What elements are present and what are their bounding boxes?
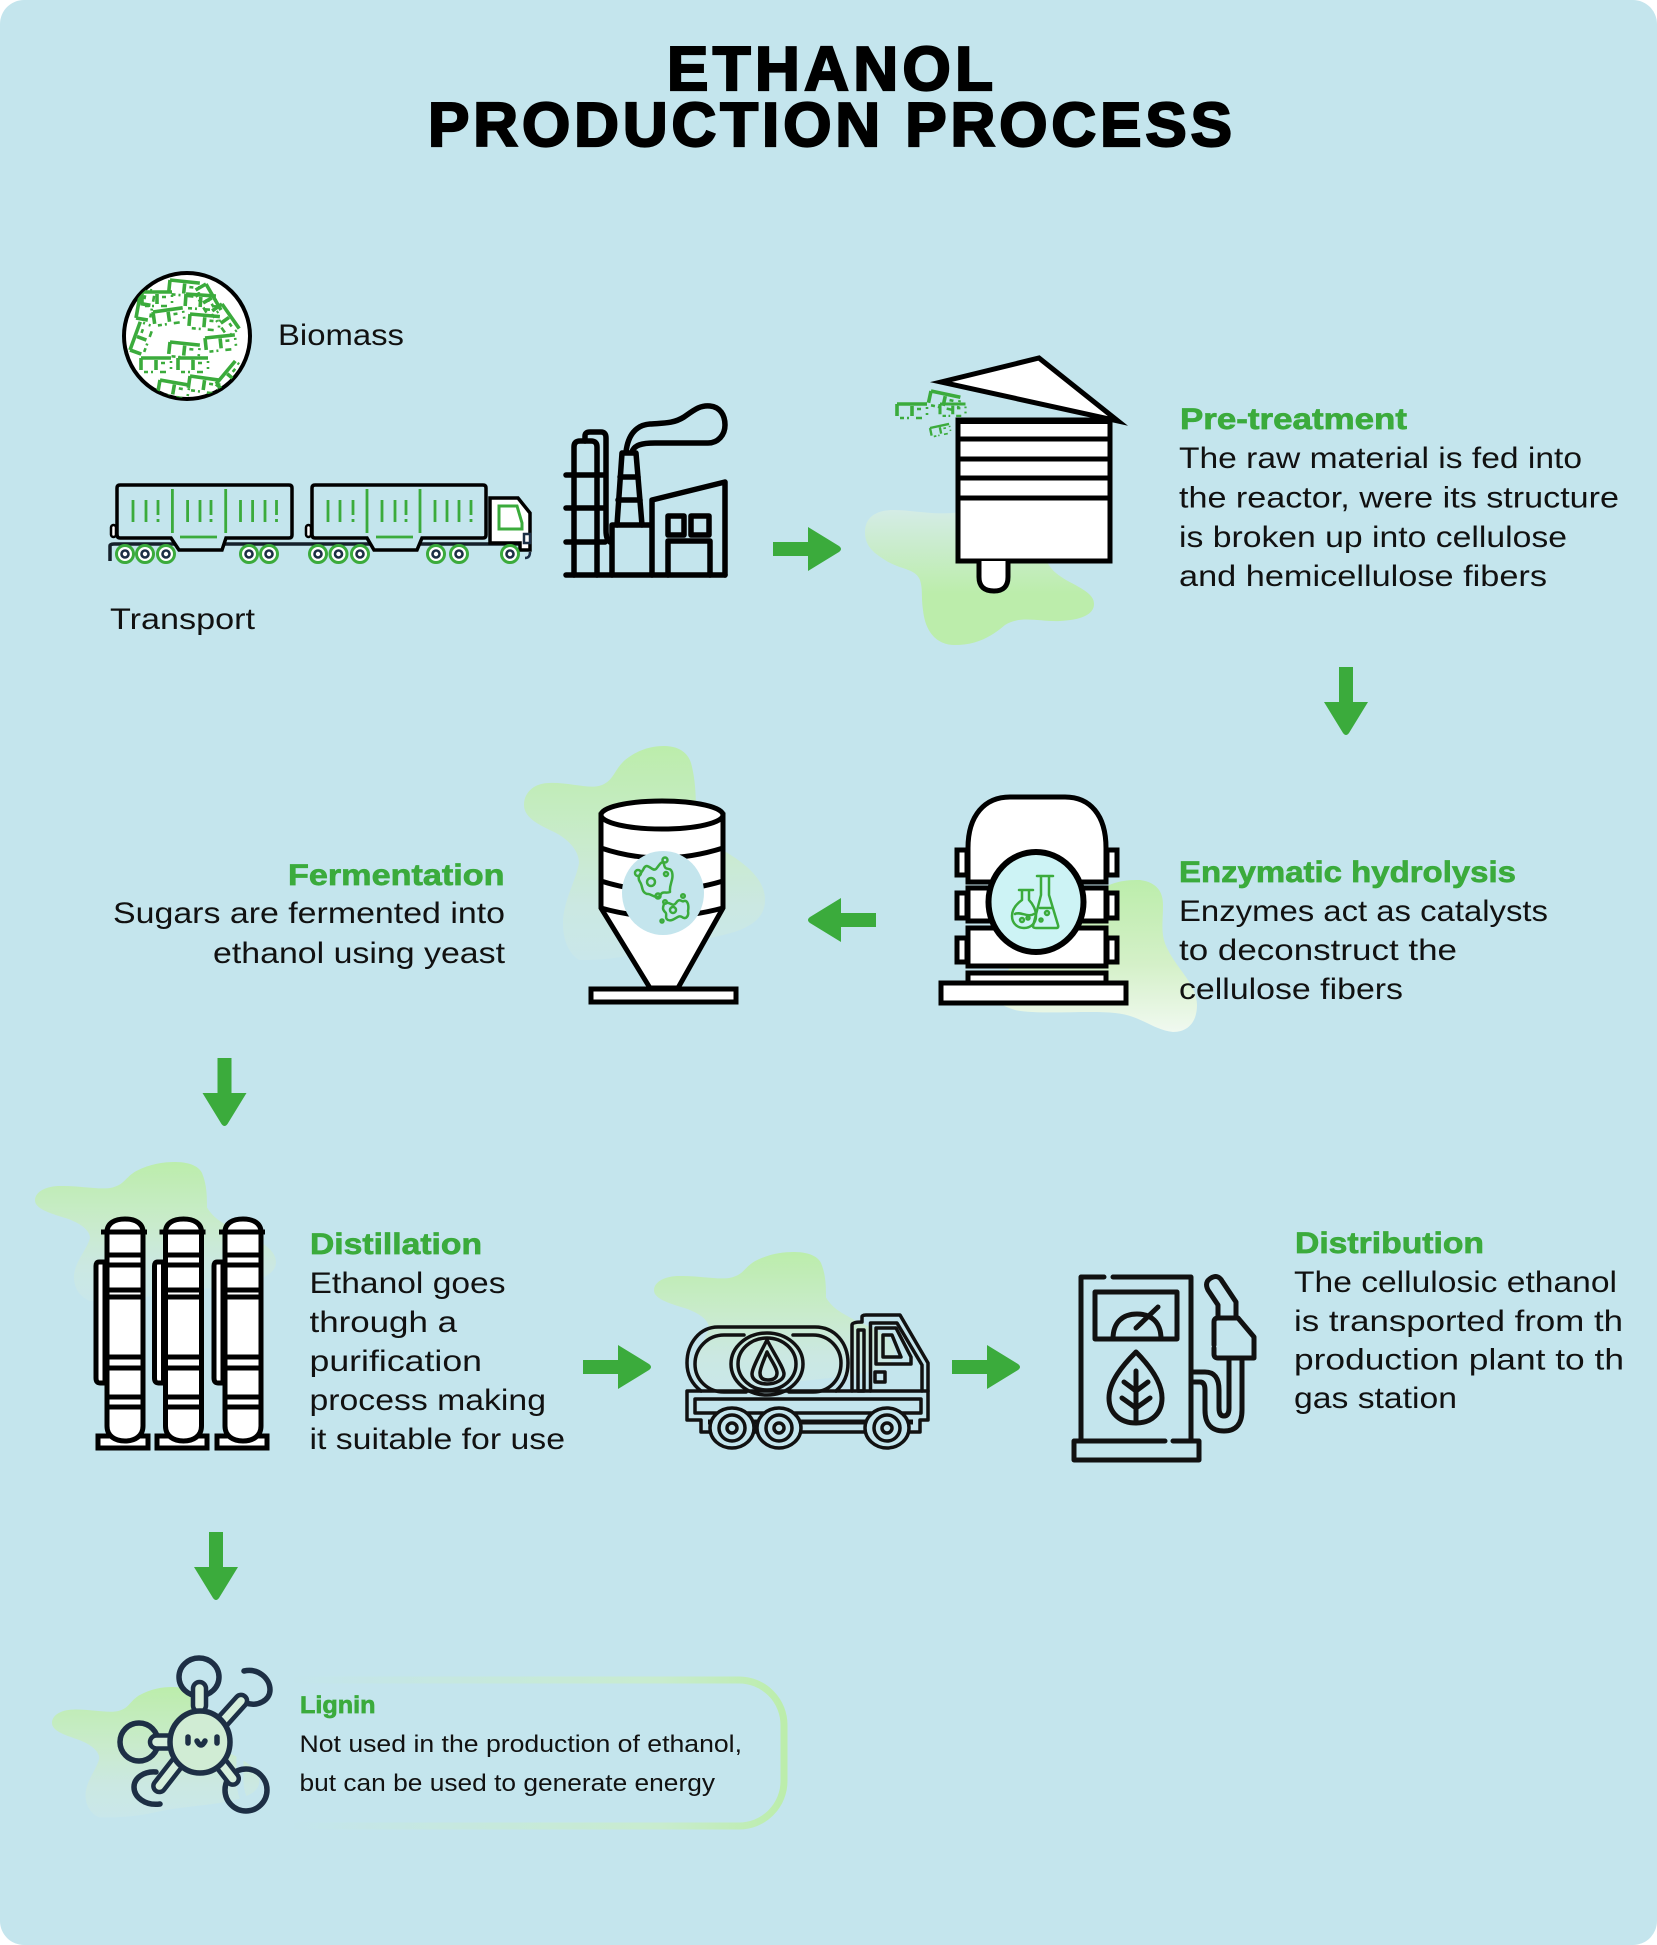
text block: distribution: The cellulosic ethanol (1294, 1266, 1617, 1299)
callout frame: lignin (240, 1680, 784, 1826)
text block: distillation: it suitable for use (310, 1423, 565, 1456)
text block: distillation: through a (310, 1306, 457, 1339)
icon: lignin molecule (120, 1658, 270, 1811)
text block: distillation: process making (310, 1384, 546, 1417)
text block: distillation (310, 1228, 565, 1456)
text block: pre-treatment: Pre-treatment (1180, 403, 1407, 436)
column 1 (96, 1219, 148, 1448)
label: biomass: Biomass (278, 319, 404, 352)
text block: pre-treatment: The raw material is fed into (1179, 442, 1582, 475)
text block: enzymatic hydrolysis (1179, 856, 1548, 1006)
arrow: distillation to tanker (583, 1345, 651, 1389)
icon: tanker truck (687, 1315, 928, 1448)
icon: fermentation tank (591, 801, 736, 1002)
text block: lignin (300, 1692, 742, 1797)
text block: enzymatic hydrolysis: to deconstruct the (1179, 934, 1457, 967)
arrow: fermentation to distillation (202, 1058, 246, 1126)
arrow: pre-treatment to hydrolysis (1324, 667, 1368, 735)
text block: enzymatic hydrolysis: Enzymes act as catalysts (1179, 895, 1548, 928)
text block: enzymatic hydrolysis: Enzymatic hydrolysis (1179, 856, 1516, 889)
text block: distillation: Distillation (310, 1228, 482, 1261)
icon: gas pump (1074, 1277, 1254, 1460)
column 3 (214, 1219, 267, 1448)
text block: distribution: Distribution (1295, 1227, 1484, 1260)
text block: distribution: gas station (1294, 1382, 1457, 1415)
blob: distillation (35, 1162, 276, 1301)
arrow: distillation to lignin (194, 1532, 238, 1600)
text block: fermentation: Fermentation (288, 859, 504, 892)
blob: lignin (52, 1687, 259, 1818)
title (428, 35, 1232, 160)
blob: enzymatic hydrolysis (985, 880, 1197, 1032)
blob: fermentation (524, 746, 765, 960)
text block: lignin: Not used in the production of ethanol, (300, 1731, 742, 1758)
arrow: tanker to gas pump (952, 1345, 1020, 1389)
arrow: factory to pre-treatment (773, 527, 841, 571)
text block: distribution: is transported from th (1294, 1305, 1623, 1338)
text block: pre-treatment: the reactor, were its structure (1179, 482, 1619, 514)
icon: factory (566, 406, 725, 575)
text block: lignin: but can be used to generate energy (300, 1770, 715, 1797)
text block: distillation: purification (310, 1345, 482, 1378)
text block: distillation: Ethanol goes (310, 1267, 506, 1300)
text block: pre-treatment: is broken up into cellulose (1179, 521, 1567, 554)
text block: distribution (1294, 1227, 1624, 1415)
text block: enzymatic hydrolysis: cellulose fibers (1179, 973, 1403, 1006)
text block: pre-treatment (1179, 403, 1619, 593)
title: PRODUCTION PROCESS (428, 91, 1232, 160)
text block: pre-treatment: and hemicellulose fibers (1179, 560, 1547, 593)
label: transport: Transport (110, 603, 256, 636)
icon: distillation columns (96, 1219, 267, 1448)
icon: transport truck (110, 485, 530, 562)
icon: hydrolysis tank (941, 797, 1126, 1003)
text block: distribution: production plant to th (1294, 1344, 1624, 1376)
title: ETHANOL (667, 35, 993, 104)
text block: fermentation (113, 859, 506, 970)
blob: tanker (654, 1252, 895, 1391)
icon: biomass circle (124, 273, 250, 399)
column 2 (154, 1219, 207, 1448)
text block: fermentation: Sugars are fermented into (113, 897, 505, 930)
text block: fermentation: ethanol using yeast (213, 937, 506, 970)
blob: pre-treatment (865, 510, 1094, 645)
icon: flasks (1012, 876, 1058, 928)
icon: reactor (897, 358, 1118, 591)
icon: yeast cells (635, 858, 688, 922)
text block: lignin: Lignin (300, 1692, 376, 1719)
arrow: hydrolysis to fermentation (808, 898, 876, 942)
